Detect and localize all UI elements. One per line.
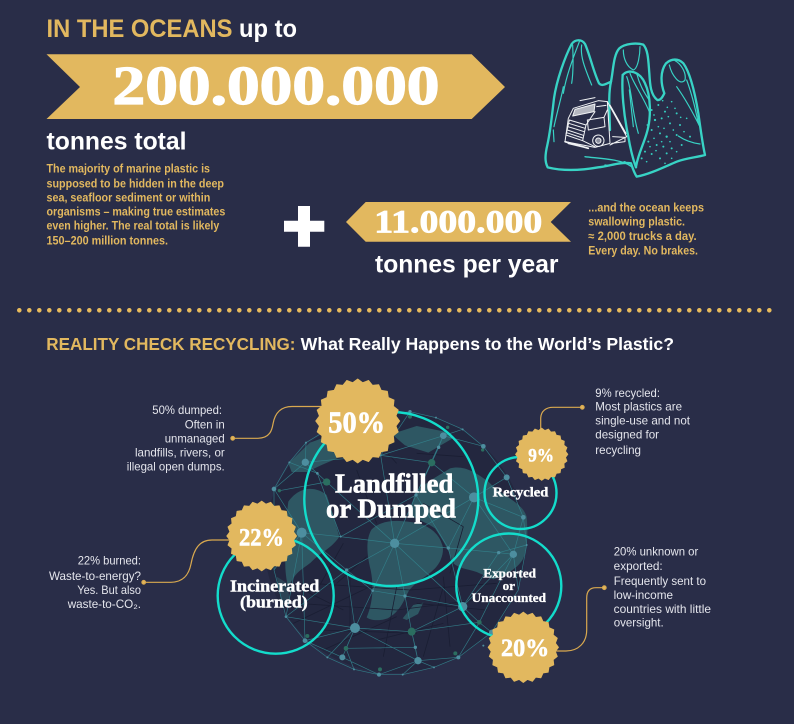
callout: 20% unknown or exported: Frequently sent to xyxy=(614,575,706,588)
heading: reality check recycling: REALITY CHECK RECYCLING: xyxy=(46,334,295,354)
text block: trucks a day xyxy=(588,202,704,258)
badge: 9% xyxy=(515,428,568,481)
globe: dark back-side links xyxy=(290,430,497,657)
label: landfilled or dumped xyxy=(326,469,456,524)
chart: network globe xyxy=(264,410,528,677)
label: exported or unaccounted: or xyxy=(503,579,515,593)
callout: 22% burned: Yes. But also xyxy=(77,584,141,597)
connector: 50% callout xyxy=(231,406,322,440)
callout: 50% dumped: unmanaged xyxy=(165,433,225,446)
heading: tonnes total: tonnes total xyxy=(46,127,186,155)
connector: 22% callout xyxy=(142,540,232,584)
callout: 50% dumped: illegal open dumps. xyxy=(127,461,225,474)
connector: 9% callout xyxy=(541,406,584,430)
badge: 22% xyxy=(227,501,297,571)
globe: network links xyxy=(274,412,527,675)
icon: plastic bags with truck xyxy=(545,40,705,177)
text block: trucks a day: swallowing plastic. xyxy=(588,216,685,229)
label: exported or unaccounted: Unaccounted xyxy=(472,591,546,605)
callout: 22% burned xyxy=(49,555,141,611)
text block: trucks a day: ...and the ocean keeps xyxy=(588,202,704,215)
label: incinerated burned: (burned) xyxy=(240,593,308,612)
label: landfilled or dumped: or Dumped xyxy=(326,494,456,524)
callout: 22% burned: Waste-to-energy? xyxy=(49,570,141,583)
callout: 9% recycled: recycling xyxy=(595,444,641,457)
heading: tonnes per year: tonnes per year xyxy=(375,251,559,279)
callout: 9% recycled: single-use and not xyxy=(595,415,691,428)
ribbon: 11 million per year xyxy=(346,202,571,242)
callout: 20% unknown or exported: 20% unknown or xyxy=(614,546,698,559)
badge: 20%: 20% xyxy=(501,635,549,662)
badge: 50%: 50% xyxy=(328,405,385,439)
text block: trucks a day: Every day. No brakes. xyxy=(588,245,698,258)
callout: 9% recycled: designed for xyxy=(595,429,659,442)
label: landfilled or dumped: Landfilled xyxy=(335,469,453,499)
text block: marine plastic explanation: supposed to be hidden in the deep xyxy=(46,177,224,190)
icon: truck xyxy=(565,98,627,148)
ring: exported xyxy=(456,534,561,638)
icon: bag outlines xyxy=(545,40,705,177)
icon: speckled plastic dots xyxy=(641,100,691,164)
globe: blue nodes xyxy=(272,410,528,677)
callout: 50% dumped: Often in xyxy=(185,419,225,432)
text block: marine plastic explanation: even higher. The real total is likely xyxy=(46,220,220,233)
ring: incinerated xyxy=(218,538,334,654)
callout: 50% dumped: landfills, rivers, or xyxy=(135,447,225,460)
callout: 9% recycled: 9% recycled: xyxy=(595,387,660,400)
icon: plus sign xyxy=(284,206,324,247)
callout: 50% dumped: 50% dumped: xyxy=(152,404,222,417)
callout: 20% unknown or exported xyxy=(614,546,711,630)
heading: what really happens: What Really Happens to the World’s Plastic? xyxy=(301,334,674,354)
callout: 20% unknown or exported: exported: xyxy=(614,560,663,573)
label: exported or unaccounted xyxy=(472,566,546,605)
ring: recycled xyxy=(484,457,556,529)
label: incinerated burned xyxy=(230,577,320,612)
label: exported or unaccounted: Exported xyxy=(483,566,536,580)
callout: 50% dumped xyxy=(127,404,225,474)
callout: 22% burned: waste-to-CO₂. xyxy=(67,598,141,611)
callout: 20% unknown or exported: oversight. xyxy=(614,617,664,630)
ribbon: 200 million total: 200.000.000 xyxy=(112,56,440,117)
globe: continents xyxy=(277,426,527,620)
ribbon: 200 million total xyxy=(46,54,505,119)
badge: 22%: 22% xyxy=(239,524,284,551)
badge: 20% xyxy=(488,612,559,683)
ring: landfilled or dumped xyxy=(304,412,478,586)
label: incinerated burned: Incinerated xyxy=(230,577,320,596)
badge: 50% xyxy=(316,379,400,463)
callout: 20% unknown or exported: countries with little xyxy=(614,603,711,616)
text block: marine plastic explanation: The majority of marine plastic is xyxy=(46,163,210,176)
globe: green nodes xyxy=(278,415,484,671)
callout: 22% burned: 22% burned: xyxy=(78,555,141,568)
callout: 9% recycled: Most plastics are xyxy=(595,401,682,414)
label: recycled: Recycled xyxy=(493,485,549,500)
callout: 9% recycled xyxy=(595,387,691,457)
text block: marine plastic explanation: sea, seafloor sediment or within xyxy=(46,191,210,204)
text block: marine plastic explanation: 150–200 million tonnes. xyxy=(46,234,168,247)
text block: trucks a day: ≈ 2,000 trucks a day. xyxy=(588,230,697,243)
connector: 20% callout xyxy=(554,586,606,651)
heading: in the oceans up to: IN THE OCEANS xyxy=(46,15,232,43)
heading suffix: up to: up to xyxy=(239,15,297,43)
text block: marine plastic explanation: organisms – making true estimates xyxy=(46,206,225,219)
callout: 20% unknown or exported: low-income xyxy=(614,589,673,602)
ribbon: 11 million per year: 11.000.000 xyxy=(374,204,542,240)
text block: marine plastic explanation xyxy=(46,163,225,247)
badge: 9%: 9% xyxy=(528,447,554,467)
